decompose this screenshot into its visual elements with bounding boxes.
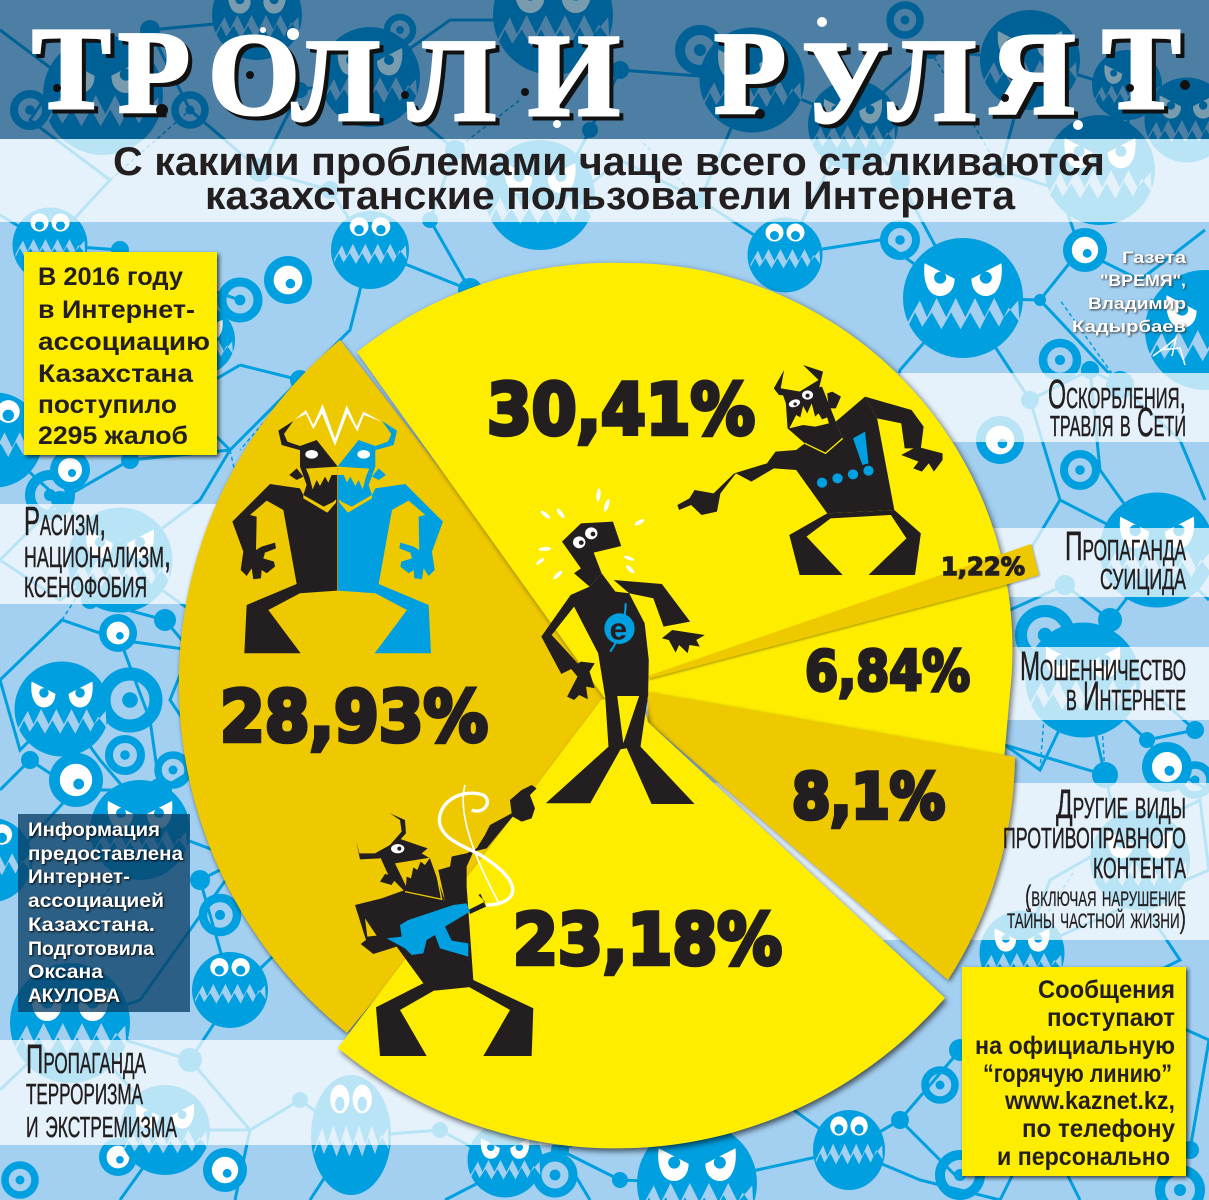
callout: complaints count (24, 252, 217, 455)
callout: hotline: поступают (1047, 1004, 1175, 1032)
label: insults (1048, 371, 1186, 445)
callout: complaints count: В 2016 году (38, 263, 183, 291)
slice: insults and fraud (357, 263, 1013, 760)
credit: "ВРЕМЯ", (1100, 271, 1186, 290)
28.93: 28,93% (220, 676, 488, 758)
23.18: 23,18% (513, 899, 782, 981)
title: РУЛЯТ (714, 3, 1181, 148)
label: other (1003, 781, 1186, 935)
category labels (24, 371, 1186, 1146)
title (32, 3, 1190, 148)
credit: Кадырбаев (1072, 317, 1186, 336)
30.41: 30,41% (487, 369, 755, 451)
info box: source: Информация (28, 820, 160, 841)
percent values (220, 369, 1025, 981)
callout: hotline: “горячую линию” (983, 1060, 1172, 1088)
8.1: 8,1% (792, 760, 945, 833)
title: ТРОЛЛИ (32, 3, 620, 146)
info box: source: предоставлена (28, 844, 183, 865)
callout: complaints count: в Интернет- (38, 296, 195, 324)
slice: terrorism 23.18% (338, 690, 945, 1148)
callout: complaints count: ассоциацию (38, 328, 210, 356)
credit: Владимир (1088, 294, 1186, 313)
credit: Газета (1122, 248, 1187, 267)
slice: racism 28.93% (179, 340, 620, 1033)
subtitle (113, 140, 1105, 218)
slice: suicide 1.22% (648, 544, 1039, 679)
lightning between trolls (295, 404, 382, 446)
icon: exclamation mark (817, 432, 874, 488)
callout: complaints count: Казахстана (38, 360, 194, 388)
figure: two trolls (232, 404, 443, 653)
black troll half (232, 421, 337, 653)
info box: source: АКУЛОВА (28, 986, 120, 1007)
info box: source (18, 814, 190, 1012)
slice: other 8.1% (648, 692, 1015, 980)
figure: pointing troll (677, 365, 943, 575)
pie chart (179, 263, 1039, 1148)
callout: hotline: Сообщения (1038, 976, 1175, 1004)
label: racism: национализм, (24, 530, 171, 576)
label: terrorism: Пропаганда (26, 1036, 146, 1082)
callout: hotline: по телефону (1022, 1115, 1175, 1143)
label: terrorism (26, 1036, 177, 1146)
icon: dollar sign (439, 785, 513, 905)
6.84: 6,84% (805, 639, 970, 703)
label: suicide (1065, 523, 1186, 598)
credit (1072, 248, 1187, 365)
info box: source: ассоциацией (28, 891, 164, 912)
figure: frightened user (535, 488, 705, 804)
callout: hotline: на официальную (975, 1032, 1175, 1060)
callout: hotline (962, 967, 1186, 1176)
info box: source: Интернет- (28, 867, 130, 888)
label: terrorism: терроризма (26, 1067, 143, 1113)
label: racism: Расизм, (24, 498, 106, 544)
icon: internet explorer logo (604, 603, 635, 652)
signature (1153, 338, 1185, 365)
callout: hotline: и персонально (997, 1143, 1170, 1171)
icon: internet explorer logo: e (610, 612, 627, 646)
fright sparks (535, 488, 645, 580)
label: terrorism: и экстремизма (26, 1100, 177, 1146)
header band (0, 0, 1209, 139)
icon: rifle (387, 894, 486, 957)
subtitle: казахстанские пользователи Интернета (205, 174, 1016, 218)
callout: hotline: www.kaznet.kz, (1004, 1087, 1175, 1115)
callout: complaints count: поступило (38, 391, 177, 419)
label: fraud (1020, 643, 1186, 719)
callout: complaints count: 2295 жалоб (38, 422, 188, 450)
label: racism (24, 498, 171, 606)
1.22: 1,22% (941, 552, 1025, 581)
figure: armed troll with dollar (355, 785, 537, 1056)
info box: source: Оксана (28, 962, 103, 983)
subtitle: С какими проблемами чаще всего сталкиваются (113, 140, 1105, 184)
info box: source: Подготовила (28, 939, 154, 960)
info box: source: Казахстана. (28, 915, 155, 936)
label: racism: ксенофобия (24, 560, 147, 606)
blue troll half (338, 421, 443, 653)
